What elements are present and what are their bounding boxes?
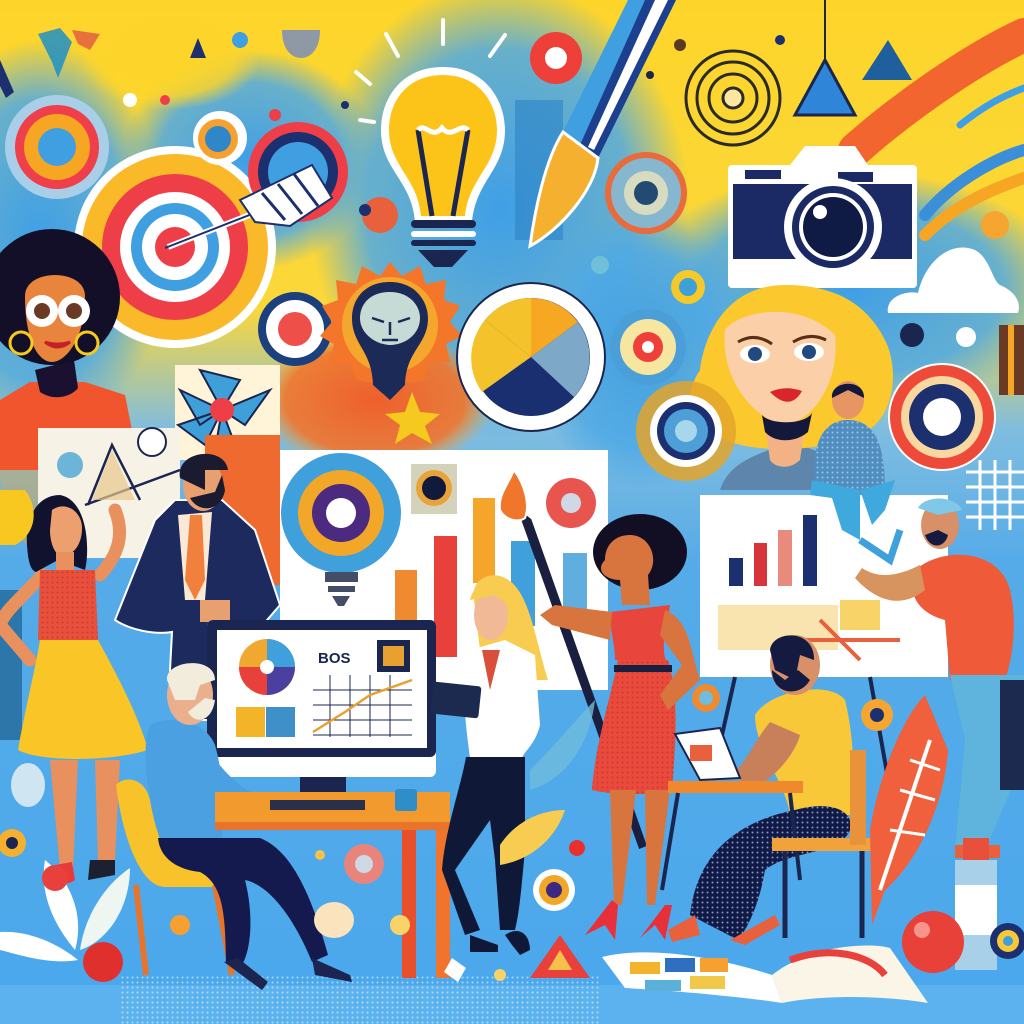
lens badge [605,152,687,234]
right chart panel [700,495,948,790]
chart bars [395,498,587,657]
blue building [515,100,563,240]
sketch panel left [38,428,180,558]
lens near portrait [636,381,736,481]
woman in red dress with brush [540,514,700,940]
rainbow stripes top right [855,35,1024,235]
blond woman with tablet [430,575,548,955]
ring badge [258,292,332,366]
donut [546,478,596,528]
paintbrush [500,470,645,847]
chair right [772,750,872,938]
woman in red and yellow dress [0,495,148,883]
lens square [411,464,457,514]
monitor line chart [313,675,412,737]
man at right with orange shirt [855,498,1024,858]
triangle bottom [530,935,590,978]
rays of the lightbulb [356,20,505,122]
top decor triangles and shapes [0,0,912,115]
monitor small tile [377,640,410,672]
plant centre [500,700,595,865]
laptop and table [662,728,803,890]
plants left bottom [0,763,130,982]
flower panel [175,365,280,460]
heart badge [530,32,582,84]
pie chart [457,283,605,431]
big target bulb [281,453,401,606]
afro woman [0,229,140,470]
concentric circles [686,51,780,145]
monitor [207,620,436,795]
center chart panel [280,450,608,690]
grid icon [966,460,1024,530]
man with laptop [668,635,854,945]
ring badge near portrait [610,270,705,385]
confetti dots [123,35,1009,981]
small badges bottom centre [314,684,893,982]
monitor label: BOS [318,650,351,667]
bulb face with sunburst [320,262,462,444]
books right edge [999,325,1024,395]
red ball [902,911,964,973]
blond woman portrait [690,285,893,490]
ring decor behind arrow [193,111,348,222]
orange panel behind man [205,435,280,585]
right target [888,363,996,471]
lightbulb [381,67,505,267]
arrow [165,165,332,248]
open book [602,945,928,1003]
monitor tiles [236,707,295,737]
yellow chair [116,780,240,975]
camera [728,146,917,288]
man in suit [115,454,280,720]
big feather pen [870,695,948,925]
seated man on panel [810,381,895,540]
desk [215,789,450,978]
pencil [530,0,676,246]
ring bottom right [990,923,1024,959]
top-left small target [5,95,109,199]
bottle [955,838,997,970]
big target with arrow [74,146,276,348]
man at desk [145,663,352,990]
monitor pie [239,639,295,695]
yellow arch left [0,490,34,545]
cloud [888,248,1019,313]
